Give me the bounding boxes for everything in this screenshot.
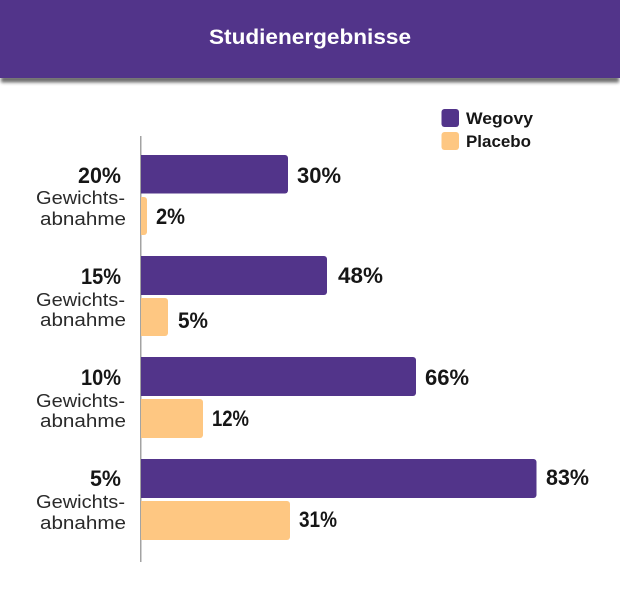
category label 20%: Gewichts- bbox=[36, 187, 125, 208]
category label 10%: abnahme bbox=[40, 410, 126, 431]
group: 20% bbox=[36, 155, 341, 235]
header banner bbox=[0, 0, 620, 82]
group: 10% bbox=[36, 357, 469, 438]
legend bbox=[442, 109, 534, 151]
bar Placebo 2%: 2% bbox=[156, 204, 185, 229]
bar Placebo 31%: 31% bbox=[299, 507, 337, 532]
bar Wegovy 66%: 66% bbox=[425, 365, 469, 390]
legend item: Wegovy: Wegovy bbox=[466, 110, 534, 128]
group: 5% bbox=[36, 459, 589, 540]
bar Placebo 31% bbox=[141, 501, 337, 540]
bar Wegovy 48% bbox=[141, 256, 383, 295]
category label 5% bbox=[36, 466, 126, 533]
bar Wegovy 66% bbox=[141, 357, 469, 396]
bar Placebo 5%: 5% bbox=[178, 308, 208, 333]
bar Wegovy 83%: 83% bbox=[546, 465, 589, 490]
bar Placebo 12%: 12% bbox=[212, 406, 249, 431]
axis line bbox=[140, 136, 142, 562]
bar Wegovy 48%: 48% bbox=[338, 263, 383, 288]
category label 10%: 10% bbox=[81, 365, 121, 390]
bar Placebo 12% bbox=[141, 399, 249, 438]
category label 15%: 15% bbox=[81, 264, 121, 289]
category label 10% bbox=[36, 365, 126, 431]
category label 20%: 20% bbox=[78, 163, 121, 188]
bar Wegovy 83% bbox=[141, 459, 589, 498]
category label 15%: Gewichts- bbox=[36, 289, 125, 310]
group: 15% bbox=[36, 256, 383, 336]
title: Studienergebnisse bbox=[209, 25, 411, 49]
category label 5%: abnahme bbox=[40, 512, 126, 533]
bar Placebo 5% bbox=[141, 298, 208, 336]
category label 15% bbox=[36, 264, 126, 330]
chart: weight loss results bbox=[36, 136, 589, 562]
bar Placebo 2% bbox=[141, 197, 185, 235]
category label 5%: 5% bbox=[90, 466, 121, 491]
category label 10%: Gewichts- bbox=[36, 390, 125, 411]
category label 5%: Gewichts- bbox=[36, 491, 125, 512]
category label 20% bbox=[36, 163, 126, 229]
legend item: Placebo: Placebo bbox=[466, 133, 531, 151]
bar Wegovy 30%: 30% bbox=[297, 163, 341, 188]
category label 20%: abnahme bbox=[40, 208, 126, 229]
category label 15%: abnahme bbox=[40, 309, 126, 330]
bar Wegovy 30% bbox=[141, 155, 341, 194]
